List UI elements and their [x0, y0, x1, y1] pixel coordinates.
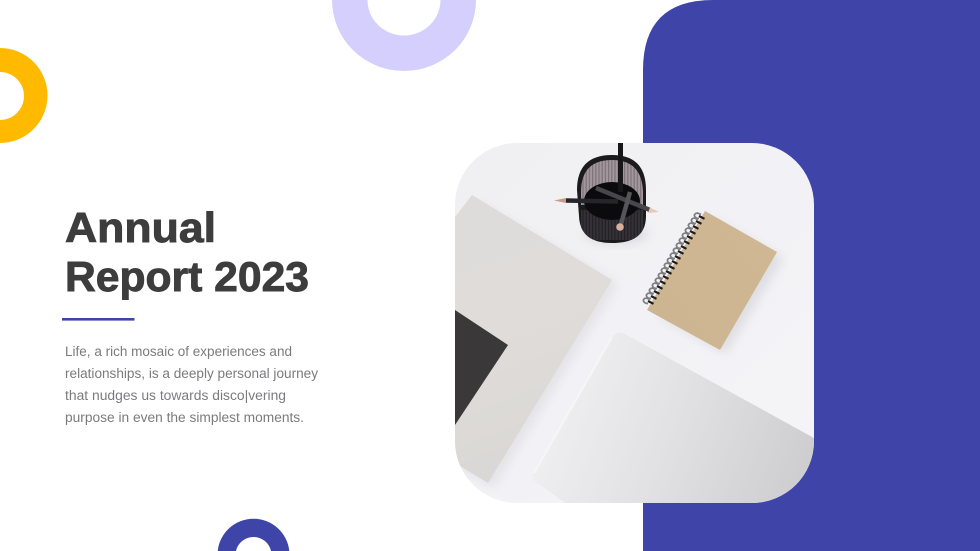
- blue background panel: [643, 0, 980, 551]
- spiral notebook: [643, 211, 784, 354]
- photo: desk flat lay: [455, 143, 814, 503]
- yellow ring decoration: [0, 48, 48, 143]
- title: Report 2023: [65, 253, 309, 300]
- pen holder: [554, 143, 659, 245]
- pencils: [554, 143, 659, 231]
- body text: [65, 344, 318, 425]
- body text: that nudges us towards disco|vering: [65, 388, 286, 403]
- title: [65, 204, 309, 300]
- laptop: [532, 333, 814, 503]
- body text: purpose in even the simplest moments.: [65, 410, 304, 425]
- body text: relationships, is a deeply personal journey: [65, 366, 318, 381]
- blue ring decoration: [218, 519, 289, 551]
- title: Annual: [65, 204, 216, 251]
- grey folder: [455, 195, 618, 488]
- title underline: [62, 318, 134, 321]
- body text: Life, a rich mosaic of experiences and: [65, 344, 292, 359]
- lilac ring decoration: [332, 0, 476, 71]
- notebook spiral binding: [643, 213, 704, 304]
